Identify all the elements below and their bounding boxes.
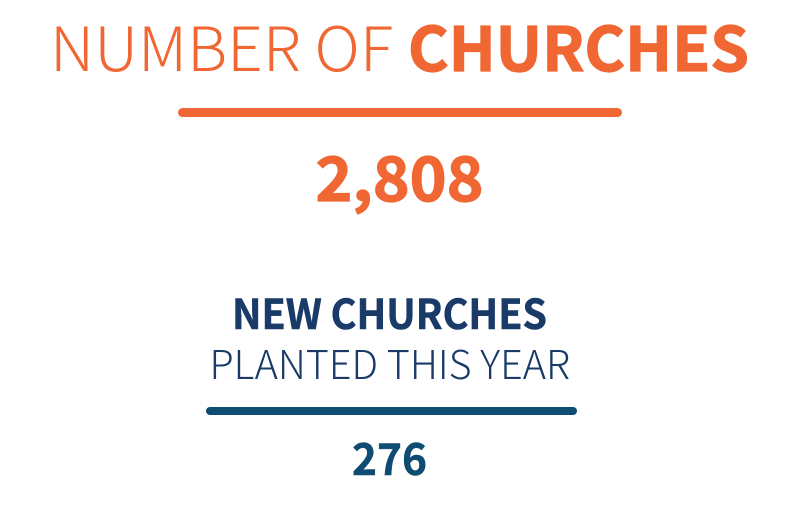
heading: new churches: NEW CHURCHES: [232, 281, 547, 341]
stat: new churches planted: 276: [352, 424, 427, 488]
orange divider bar: [178, 108, 622, 117]
title: number of churches: [50, 0, 749, 89]
title: number of churches: CHURCHES: [408, 0, 749, 89]
navy divider bar: [206, 407, 577, 415]
stat: total churches: 2,808: [316, 130, 484, 219]
title: number of churches: NUMBER OF: [50, 0, 393, 89]
subheading: planted this year: PLANTED THIS YEAR: [210, 333, 570, 391]
